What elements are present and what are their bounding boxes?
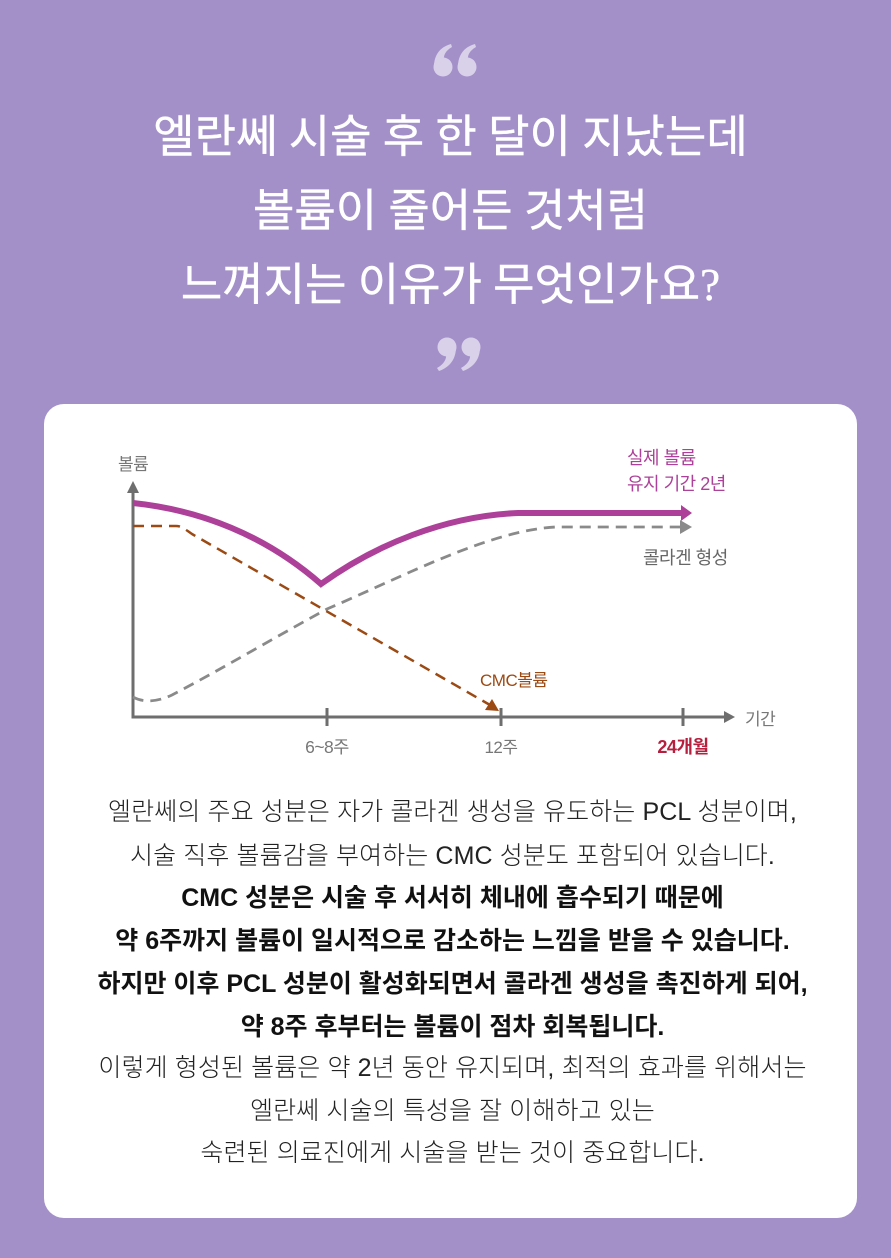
real volume label: 실제 볼륨: [627, 448, 696, 468]
CMC label: CMC볼륨: [480, 671, 548, 690]
brown dashed CMC curve: [133, 526, 499, 711]
tick 24 months: 24개월: [657, 737, 709, 757]
line chart: volume over time: [118, 448, 776, 757]
x axis label: 기간: [745, 710, 776, 729]
axis arrowheads: [127, 481, 735, 723]
axes: [133, 490, 725, 726]
magenta real volume curve: [133, 503, 692, 584]
paragraph line 5: 숙련된 의료진에게 시술을 받는 것이 중요합니다.: [200, 1139, 705, 1167]
bold line 1: CMC 성분은 시술 후 서서히 체내에 흡수되기 때문에: [181, 884, 724, 912]
heading line 3: 느껴지는 이유가 무엇인가요?: [181, 260, 720, 310]
heading line 2: 볼륨이 줄어든 것처럼: [253, 186, 648, 236]
icon: closing quotation mark: [437, 338, 480, 371]
paragraph line 1: 엘란쎄의 주요 성분은 자가 콜라겐 생성을 유도하는 PCL 성분이며,: [108, 798, 797, 826]
paragraph line 4: 엘란쎄 시술의 특성을 잘 이해하고 있는: [250, 1097, 655, 1125]
bold line 2: 약 6주까지 볼륨이 일시적으로 감소하는 느낌을 받을 수 있습니다.: [115, 927, 790, 955]
chart labels: [118, 448, 776, 757]
tick 6~8 weeks: 6~8주: [305, 737, 349, 757]
panel: white card: [44, 404, 857, 1218]
paragraph line 2: 시술 직후 볼륨감을 부여하는 CMC 성분도 포함되어 있습니다.: [130, 842, 775, 870]
bold line 3: 하지만 이후 PCL 성분이 활성화되면서 콜라겐 생성을 촉진하게 되어,: [97, 970, 808, 998]
gray dashed collagen curve: [133, 520, 692, 701]
bold line 4: 약 8주 후부터는 볼륨이 점차 회복됩니다.: [241, 1013, 664, 1041]
collagen label: 콜라겐 형성: [643, 548, 728, 568]
heading line 1: 엘란쎄 시술 후 한 달이 지났는데: [153, 112, 748, 162]
body text: [97, 798, 808, 1167]
icon: opening quotation mark: [434, 44, 476, 76]
y axis label: 볼륨: [118, 455, 148, 474]
duration label: 유지 기간 2년: [627, 474, 726, 494]
paragraph line 3: 이렇게 형성된 볼륨은 약 2년 동안 유지되며, 최적의 효과를 위해서는: [98, 1054, 807, 1082]
tick 12 weeks: 12주: [484, 738, 518, 757]
